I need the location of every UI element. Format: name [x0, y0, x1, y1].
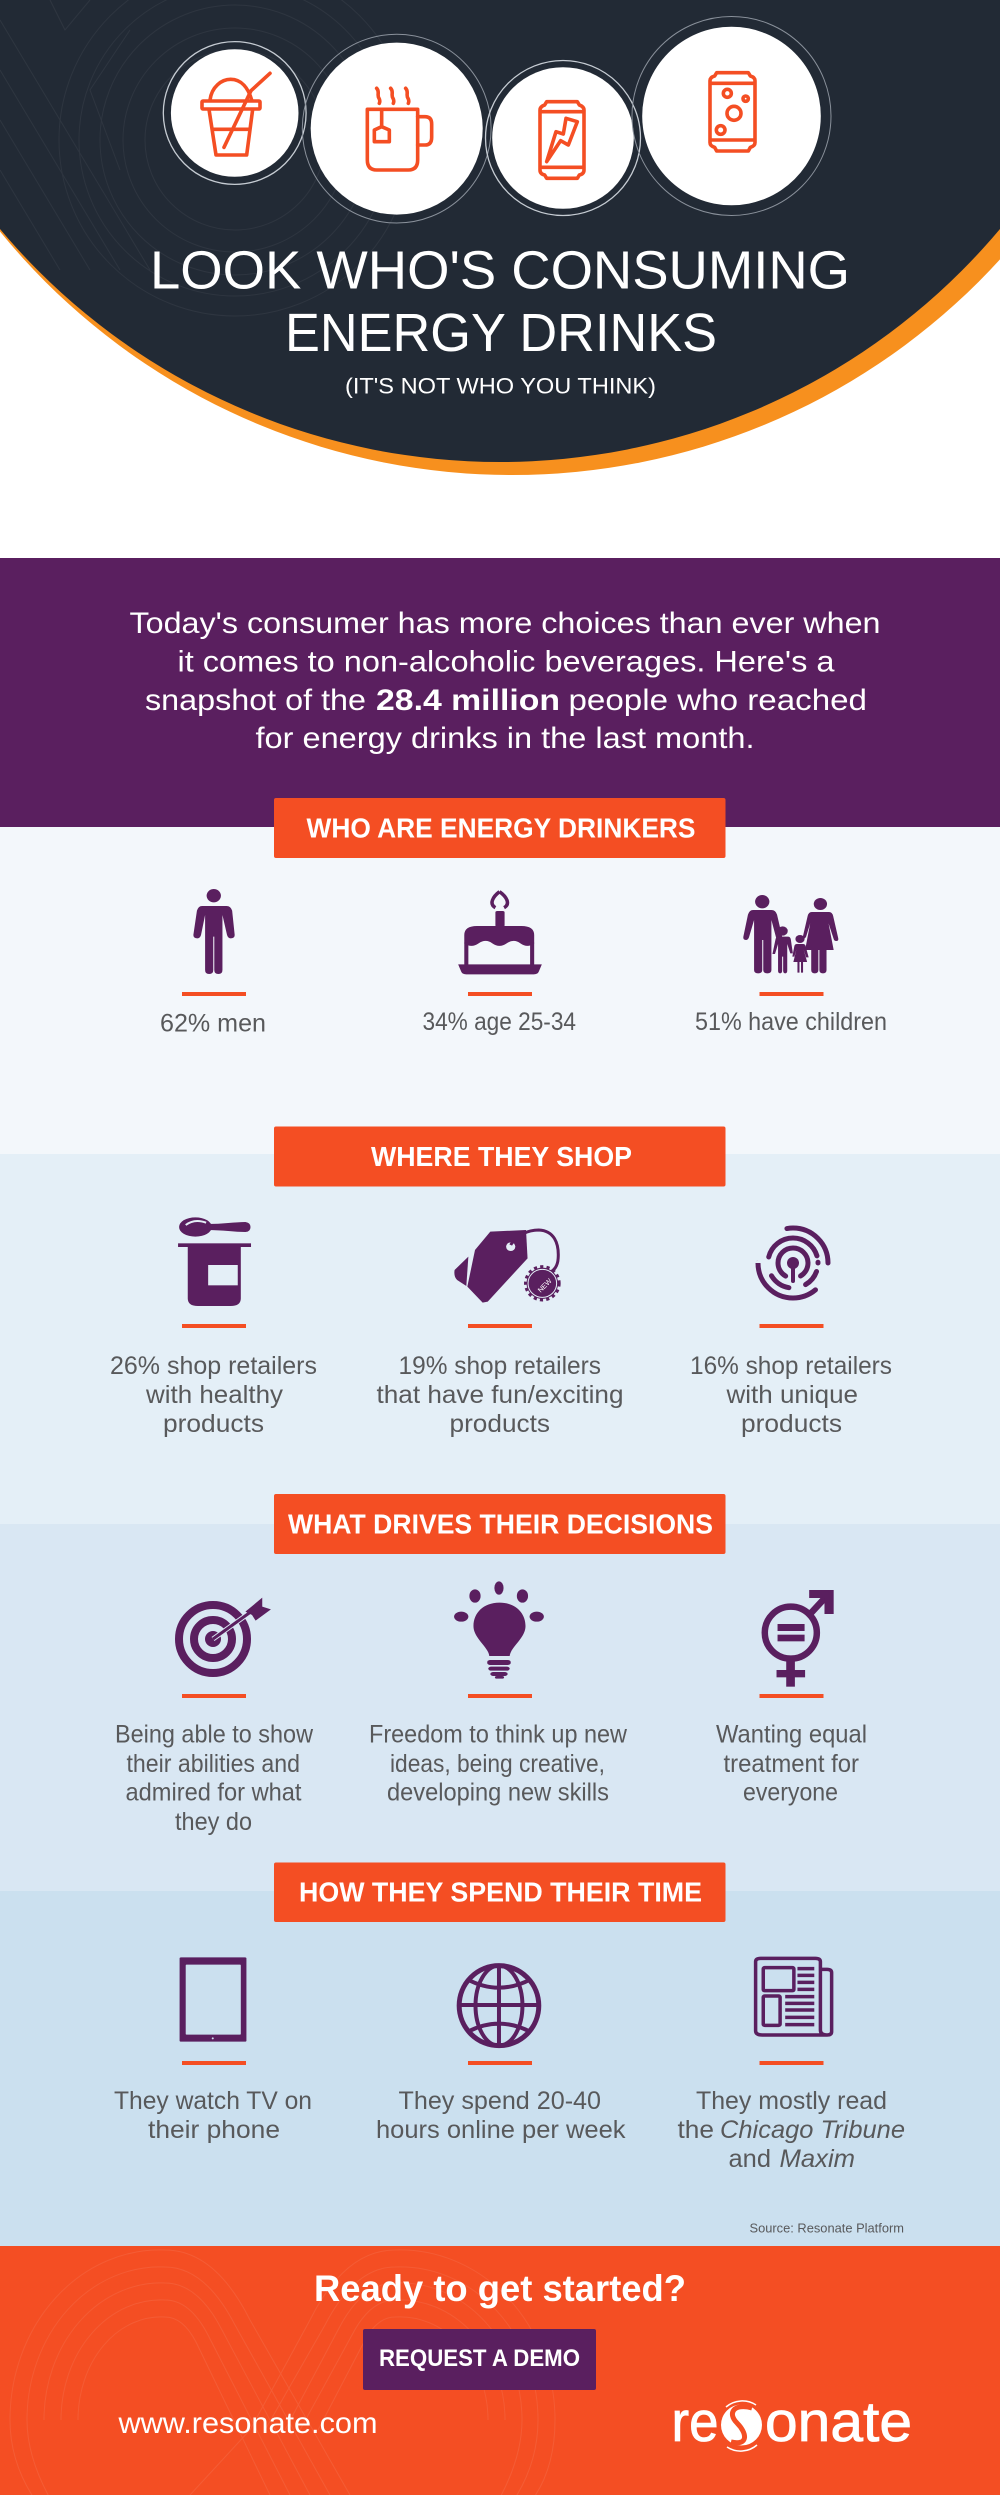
panel: who are energy drinkers	[0, 798, 1000, 1154]
title: LOOK WHO'S CONSUMING	[150, 240, 850, 300]
source note: Source: Resonate Platform	[750, 2220, 904, 2236]
icon: birthday cake	[458, 892, 542, 974]
icon: globe	[459, 1966, 539, 2046]
icon: jar and spoon	[178, 1217, 251, 1306]
stat: equal treatment: treatment for	[724, 1750, 859, 1778]
icon: lightning can in circle	[486, 60, 640, 216]
stat: freedom	[369, 1694, 628, 1806]
subtitle: (IT'S NOT WHO YOU THINK)	[345, 374, 656, 398]
stat: fun products: that have fun/exciting	[376, 1381, 624, 1409]
intro text: snapshot of the	[145, 684, 366, 717]
button: request a demo: REQUEST A DEMO	[379, 2345, 580, 2372]
website url: www.resonate.com	[117, 2407, 377, 2440]
stat: unique products: products	[741, 1410, 842, 1438]
heading: WHERE THEY SHOP	[371, 1141, 632, 1172]
heading	[274, 1494, 726, 1554]
stat: fun products: 19% shop retailers	[398, 1352, 601, 1380]
stat: children	[695, 992, 887, 1036]
intro text: people who reached	[568, 684, 867, 717]
icon: family	[743, 895, 838, 973]
stat: unique products: 16% shop retailers	[690, 1352, 892, 1380]
stat: hours online: They spend 20-40	[398, 2087, 601, 2115]
stat: fun products	[376, 1324, 624, 1438]
icon: newspaper	[756, 1958, 832, 2035]
icon: price tag: NEW	[537, 1278, 554, 1294]
intro text: 28.4 million	[376, 684, 560, 717]
heading	[274, 1126, 726, 1186]
stat: freedom: developing new skills	[387, 1778, 609, 1806]
call to action heading: Ready to get started?	[314, 2268, 686, 2309]
stat: age	[422, 992, 576, 1036]
stat: children: 51% have children	[695, 1008, 887, 1036]
heading	[274, 1862, 726, 1922]
stat: tv on phone: their phone	[148, 2116, 280, 2144]
stat: unique products: with unique	[725, 1381, 858, 1409]
stat: hours online	[376, 2061, 626, 2144]
stat: healthy products	[110, 1324, 317, 1438]
icon: cup in circle	[163, 42, 306, 184]
stat: tv on phone	[114, 2061, 312, 2144]
stat: reading	[678, 2061, 905, 2173]
intro text	[130, 607, 880, 755]
stat: unique products	[690, 1324, 892, 1438]
icon: gender equality	[765, 1590, 834, 1687]
stat: healthy products: 26% shop retailers	[110, 1352, 317, 1380]
stat: hours online: hours online per week	[376, 2116, 626, 2144]
stat: healthy products: products	[163, 1410, 264, 1438]
icon: fingerprint	[758, 1228, 828, 1298]
button: request a demo	[363, 2329, 596, 2390]
icon: target	[179, 1598, 271, 1673]
panel: what drives their decisions	[0, 1494, 1000, 1891]
heading: HOW THEY SPEND THEIR TIME	[299, 1876, 702, 1908]
stat: equal treatment: everyone	[743, 1778, 838, 1806]
stat: reading: They mostly read	[696, 2087, 887, 2115]
intro text: it comes to non-alcoholic beverages. Here's a	[178, 646, 835, 678]
stat: men	[160, 992, 266, 1038]
panel: footer	[0, 2246, 1000, 2495]
panel: header	[0, 0, 1000, 475]
panel: intro	[0, 558, 1000, 827]
stat: age: 34% age 25-34	[422, 1008, 576, 1036]
title: ENERGY DRINKS	[285, 303, 717, 363]
heading: WHAT DRIVES THEIR DECISIONS	[288, 1508, 713, 1540]
icon: man	[193, 889, 235, 974]
intro text: for energy drinks in the last month.	[256, 722, 754, 755]
icon: mug in circle	[302, 34, 491, 223]
panel: how they spend their time	[0, 1862, 1000, 2246]
icon: tablet	[180, 1957, 246, 2042]
stat: abilities: they do	[175, 1808, 252, 1836]
logo: resonate: re	[672, 2390, 718, 2454]
stat: abilities: Being able to show	[115, 1720, 314, 1748]
panel: where they shop	[0, 1126, 1000, 1524]
heading	[274, 798, 726, 858]
title	[150, 240, 850, 363]
stat: healthy products: with healthy	[145, 1381, 284, 1409]
stat: abilities: admired for what	[126, 1778, 302, 1806]
logo: resonate	[672, 2390, 912, 2454]
logo: resonate: onate	[765, 2390, 912, 2454]
icon: price tag	[454, 1230, 558, 1303]
stat: reading: and	[728, 2145, 771, 2173]
intro text: Today's consumer has more choices than ever when	[130, 607, 880, 640]
stat: abilities: their abilities and	[126, 1750, 300, 1778]
stat: reading: Maxim	[780, 2145, 855, 2173]
heading: WHO ARE ENERGY DRINKERS	[306, 812, 696, 844]
stat: men: 62% men	[160, 1010, 266, 1038]
icon: bubbles can in circle	[632, 16, 831, 216]
stat: tv on phone: They watch TV on	[114, 2087, 312, 2115]
icon: light bulb	[454, 1581, 544, 1679]
stat: abilities	[115, 1694, 314, 1836]
stat: reading: the	[678, 2116, 714, 2144]
stat: reading: Chicago Tribune	[720, 2116, 905, 2144]
stat: equal treatment	[716, 1694, 867, 1806]
stat: equal treatment: Wanting equal	[716, 1720, 867, 1748]
stat: fun products: products	[450, 1410, 550, 1438]
stat: freedom: Freedom to think up new	[369, 1720, 628, 1748]
stat: freedom: ideas, being creative,	[390, 1750, 605, 1778]
